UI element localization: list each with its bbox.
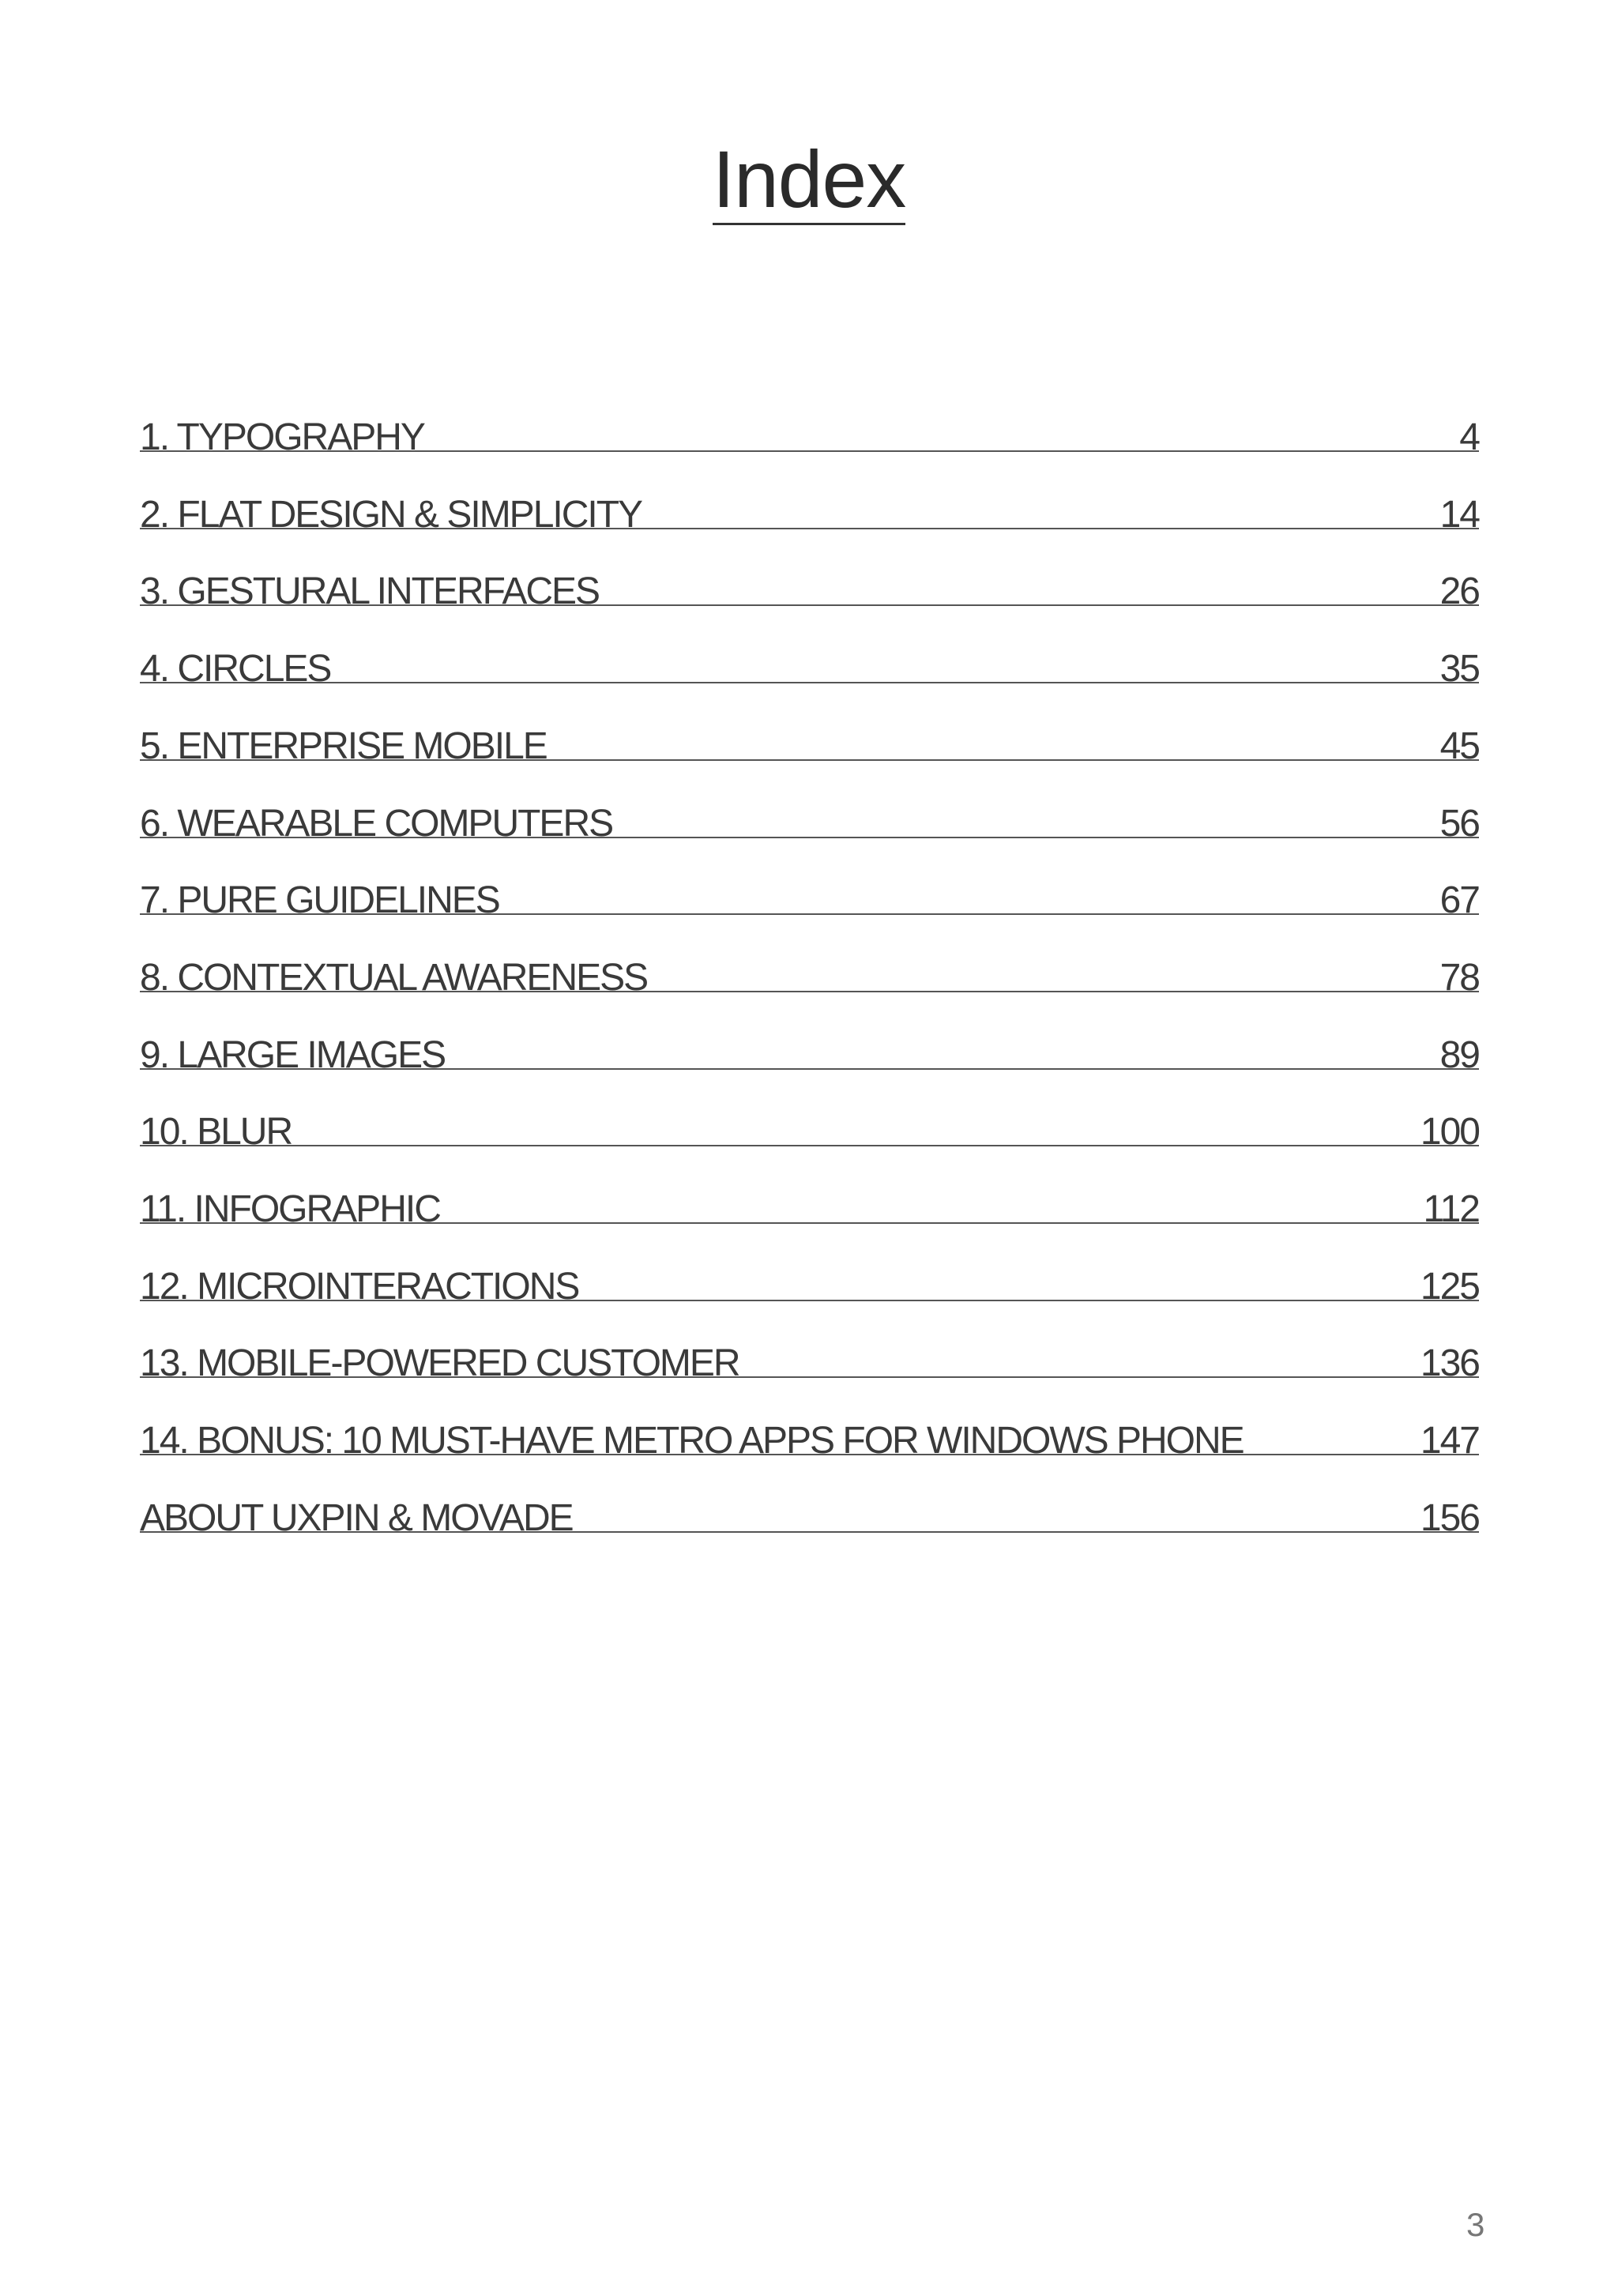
row 10: 10. BLUR (140, 1111, 292, 1153)
row 5: 5. ENTERPRISE MOBILE (140, 725, 547, 767)
row 7: 67 (1440, 879, 1479, 921)
row 9: 9. LARGE IMAGES (140, 1034, 445, 1076)
row 10 (140, 1097, 1479, 1146)
row 1: 4 (1459, 416, 1479, 458)
page number: 3 (1466, 2206, 1484, 2243)
row 4: 35 (1440, 648, 1479, 690)
row 14: 14. BONUS: 10 MUST-HAVE METRO APPS FOR WINDOWS PHONE (140, 1420, 1244, 1462)
row 15 (140, 1484, 1479, 1533)
row 1 (140, 403, 1479, 452)
row 7: 7. PURE GUIDELINES (140, 879, 499, 921)
row 4: 4. CIRCLES (140, 648, 330, 690)
row 11: 11. INFOGRAPHIC (140, 1188, 440, 1230)
row 1: 1. TYPOGRAPHY (140, 416, 424, 458)
row 3: 3. GESTURAL INTERFACES (140, 570, 599, 612)
row 12: 12. MICROINTERACTIONS (140, 1266, 578, 1308)
row 8 (140, 943, 1479, 992)
row 6 (140, 789, 1479, 837)
row 13: 136 (1420, 1342, 1479, 1384)
row 13: 13. MOBILE-POWERED CUSTOMER (140, 1342, 739, 1384)
row 11 (140, 1175, 1479, 1224)
row 9: 89 (1440, 1034, 1479, 1076)
row 2: 2. FLAT DESIGN & SIMPLICITY (140, 494, 642, 536)
row 3: 26 (1440, 570, 1479, 612)
row 9 (140, 1021, 1479, 1070)
row 12: 125 (1420, 1266, 1479, 1308)
row 14: 147 (1420, 1420, 1479, 1462)
row 5: 45 (1440, 725, 1479, 767)
row 11: 112 (1423, 1188, 1479, 1230)
row 15: ABOUT UXPIN & MOVADE (140, 1497, 573, 1539)
row 12 (140, 1252, 1479, 1301)
row 10: 100 (1420, 1111, 1479, 1153)
title: Index (713, 134, 905, 224)
row 8: 8. CONTEXTUAL AWARENESS (140, 957, 647, 999)
row 8: 78 (1440, 957, 1479, 999)
row 6: 56 (1440, 803, 1479, 844)
index list (140, 416, 1480, 1539)
row 14 (140, 1406, 1479, 1455)
row 6: 6. WEARABLE COMPUTERS (140, 803, 612, 844)
row 3 (140, 557, 1479, 606)
row 2 (140, 480, 1479, 529)
row 15: 156 (1420, 1497, 1479, 1539)
row 2: 14 (1440, 494, 1479, 536)
row 13 (140, 1329, 1479, 1378)
row 5 (140, 712, 1479, 761)
row 7 (140, 866, 1479, 915)
row 4 (140, 634, 1479, 683)
